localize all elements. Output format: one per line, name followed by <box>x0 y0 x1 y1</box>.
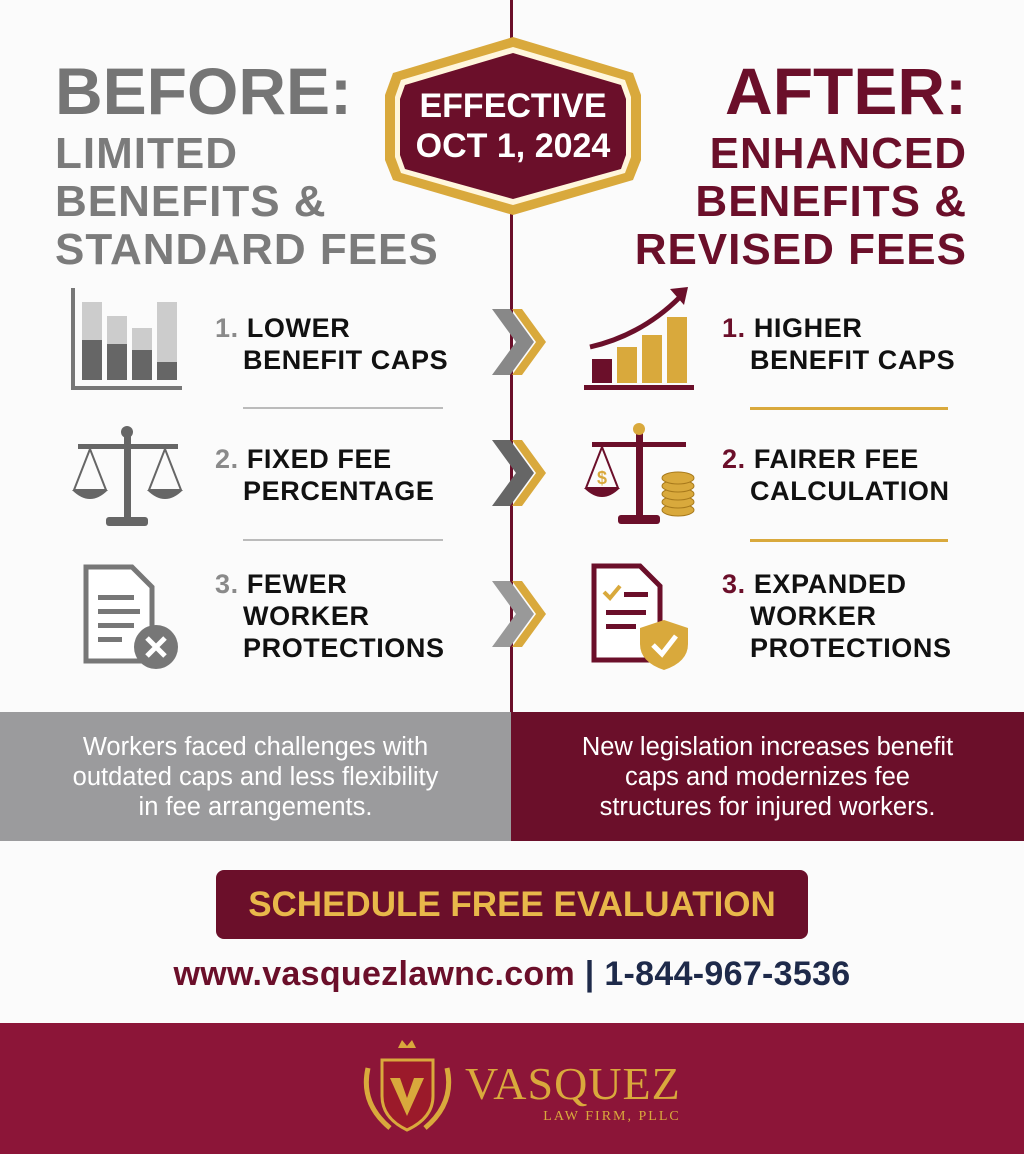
arrows: chevrons <box>492 309 546 647</box>
item: expanded worker protections: PROTECTIONS <box>750 633 952 663</box>
heading: after: BENEFITS & <box>695 177 967 226</box>
item: expanded worker protections <box>722 569 952 663</box>
heading: after <box>635 54 967 274</box>
item: fewer worker protections: 3. FEWER <box>215 569 347 599</box>
heading: before: LIMITED <box>55 129 238 178</box>
badge: effective date <box>385 37 641 215</box>
panel: after summary: structures for injured workers. <box>600 793 935 821</box>
separators left <box>243 407 443 409</box>
panel: before summary: Workers faced challenges with <box>83 733 428 761</box>
item: expanded worker protections: 3. EXPANDED <box>722 569 907 599</box>
panel: after summary: caps and modernizes fee <box>625 763 910 791</box>
heading: after: AFTER: <box>725 54 967 128</box>
item: fewer worker protections: WORKER <box>243 601 370 631</box>
item: higher benefit caps <box>722 313 955 375</box>
heading: after: REVISED FEES <box>635 225 967 274</box>
icon: scale with money: $ <box>597 468 607 488</box>
item: fixed fee percentage: 2. FIXED FEE <box>215 444 392 474</box>
logo: wordmark: LAW FIRM, PLLC <box>543 1109 681 1124</box>
item: higher benefit caps: BENEFIT CAPS <box>750 345 955 375</box>
panel: after summary: New legislation increases benefit <box>582 733 953 761</box>
heading: before: STANDARD FEES <box>55 225 439 274</box>
button: schedule free evaluation: SCHEDULE FREE EVALUATION <box>248 885 776 924</box>
item: fixed fee percentage: PERCENTAGE <box>243 476 435 506</box>
heading: after: ENHANCED <box>710 129 967 178</box>
logo: wordmark: VASQUEZ <box>465 1058 681 1109</box>
badge: effective date: EFFECTIVE <box>419 87 607 125</box>
contact line: www.vasquezlawnc.com | 1-844-967-3536 <box>173 955 851 993</box>
icon: bar chart grey <box>71 288 182 390</box>
item: expanded worker protections: WORKER <box>750 601 877 631</box>
heading: before: BENEFITS & <box>55 177 327 226</box>
item: fewer worker protections: PROTECTIONS <box>243 633 445 663</box>
footer <box>0 1023 1024 1154</box>
panel: before summary: outdated caps and less flexibility <box>73 763 438 791</box>
separators right <box>750 407 948 410</box>
item: lower benefit caps <box>215 313 448 375</box>
item: fairer fee calculation <box>722 444 950 506</box>
panel: before summary: in fee arrangements. <box>139 793 372 821</box>
item: lower benefit caps: BENEFIT CAPS <box>243 345 448 375</box>
panel: after summary <box>511 712 1024 841</box>
heading: before <box>55 54 439 274</box>
panel: before summary <box>0 712 511 841</box>
item: fairer fee calculation: 2. FAIRER FEE <box>722 444 919 474</box>
item: lower benefit caps: 1. LOWER <box>215 313 350 343</box>
divider line <box>510 0 513 712</box>
icon: scale with money <box>584 423 694 524</box>
button: schedule free evaluation <box>216 870 808 939</box>
badge: effective date: OCT 1, 2024 <box>416 127 610 165</box>
item: higher benefit caps: 1. HIGHER <box>722 313 862 343</box>
item: fixed fee percentage <box>215 444 435 506</box>
icon: document with shield <box>592 564 688 670</box>
icon: scale grey <box>72 426 183 526</box>
icon: document with x <box>84 564 178 669</box>
item: fewer worker protections <box>215 569 445 663</box>
icon: rising bar chart <box>584 287 694 390</box>
logo: emblem <box>364 1040 452 1132</box>
heading: before: BEFORE: <box>55 54 352 128</box>
item: fairer fee calculation: CALCULATION <box>750 476 950 506</box>
